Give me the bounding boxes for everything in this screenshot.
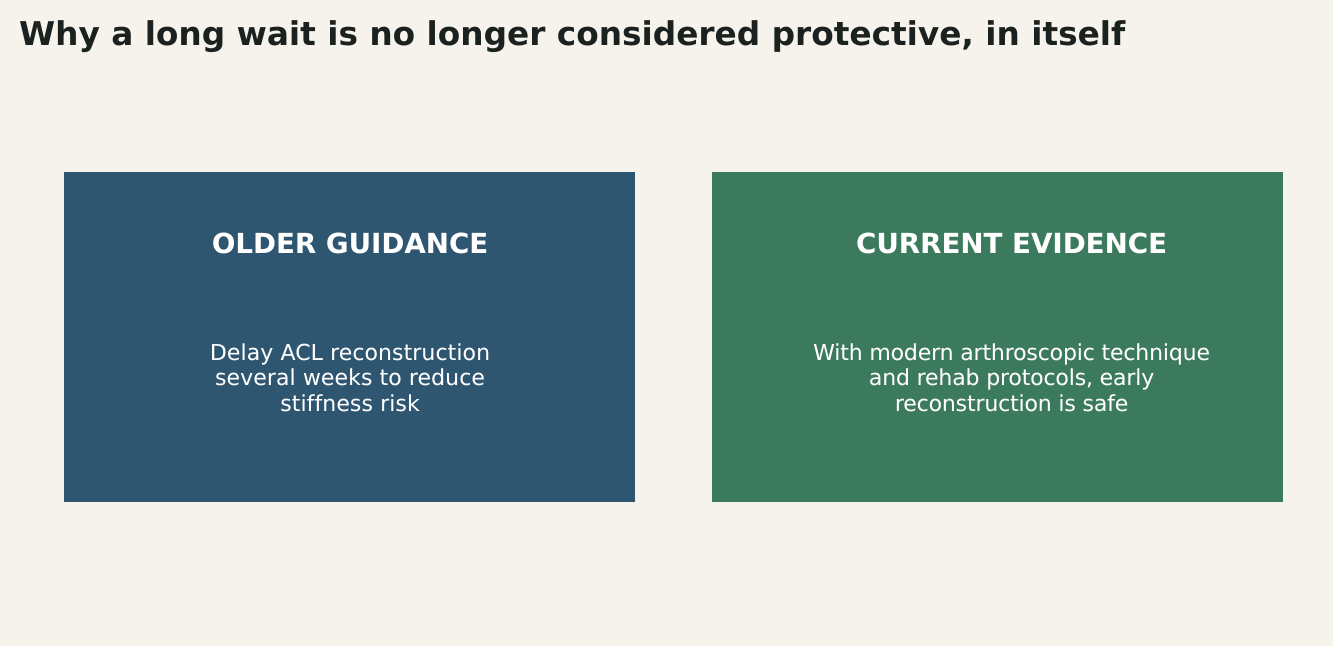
- text: current evidence body: With modern arthroscopic technique: [813, 340, 1210, 366]
- title: Why a long wait is no longer considered protective, in itself: [19, 15, 1125, 53]
- text: older guidance body: stiffness risk: [280, 392, 420, 417]
- text: current evidence body: [813, 340, 1210, 417]
- panel: current evidence: [712, 172, 1283, 502]
- text: older guidance body: several weeks to reduce: [215, 366, 485, 391]
- heading: older guidance: OLDER GUIDANCE: [212, 227, 488, 260]
- text: older guidance body: Delay ACL reconstruction: [210, 340, 490, 366]
- text: current evidence body: reconstruction is safe: [895, 392, 1128, 417]
- panel: older guidance: [64, 172, 635, 502]
- text: older guidance body: [210, 340, 490, 417]
- heading: current evidence: CURRENT EVIDENCE: [856, 227, 1167, 260]
- text: current evidence body: and rehab protocols, early: [869, 366, 1154, 391]
